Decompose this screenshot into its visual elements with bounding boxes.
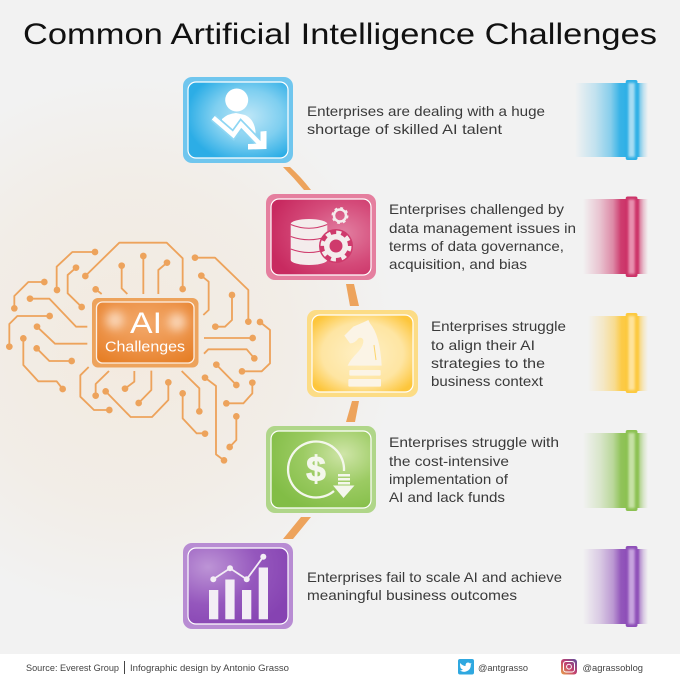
icon: chess knight (344, 320, 382, 387)
text: data management (389, 202, 576, 272)
text: cost and funds: the cost-intensive (389, 454, 509, 469)
source credit (26, 661, 289, 674)
text: strategy alignment: strategies to the (431, 356, 545, 371)
connectors (283, 167, 359, 539)
instagram handle: @agrassoblog (582, 663, 643, 674)
footer (0, 654, 680, 680)
chip: AI Challenges (92, 298, 198, 368)
side tab: yellow (588, 313, 648, 393)
icon: person with falling arrow (213, 88, 266, 150)
source credit: Source: Everest Group (26, 663, 119, 674)
text: talent shortage (307, 104, 545, 137)
card: cost and funds (266, 426, 376, 513)
text: scaling outcomes: meaningful business outcomes (307, 588, 517, 603)
card: data management (266, 194, 376, 280)
side tab: pink (583, 196, 648, 277)
text: cost and funds (389, 435, 559, 505)
card: talent shortage (183, 77, 293, 163)
text: strategy alignment (431, 319, 566, 389)
title: Common Artificial Intelligence Challenges (23, 18, 657, 51)
text: talent shortage: shortage of skilled AI talent (307, 122, 502, 137)
text: scaling outcomes (307, 570, 562, 603)
side tab: blue (575, 80, 648, 160)
side tab: green (583, 430, 648, 511)
text: scaling outcomes: Enterprises fail to scale AI and achieve (307, 570, 562, 585)
text: cost and funds: Enterprises struggle with (389, 435, 559, 450)
source credit: Infographic design by Antonio Grasso (130, 663, 289, 674)
brain circuit (6, 243, 270, 464)
text: strategy alignment: Enterprises struggle (431, 319, 566, 334)
text: strategy alignment: to align their AI (431, 338, 535, 353)
text: data management: Enterprises challenged by (389, 202, 564, 217)
text: talent shortage: Enterprises are dealing with a huge (307, 104, 545, 119)
icon: instagram (561, 659, 577, 674)
card: scaling outcomes (183, 543, 293, 629)
chip: AI Challenges: Challenges (105, 338, 185, 356)
icon: database with gears (291, 208, 353, 265)
card: strategy alignment (307, 310, 418, 397)
text: strategy alignment: business context (431, 374, 543, 389)
text: cost and funds: implementation of (389, 472, 508, 487)
side tab: purple (583, 546, 648, 627)
text: cost and funds: AI and lack funds (389, 490, 505, 505)
text: data management: acquisition, and bias (389, 257, 527, 272)
icon: twitter (458, 659, 474, 674)
chip: AI Challenges: AI (130, 307, 162, 340)
twitter handle: @antgrasso (478, 663, 528, 674)
icon: bar chart with trend line (209, 554, 268, 619)
text: data management: terms of data governance, (389, 239, 564, 254)
icon: dollar with down arrow: $ (306, 450, 326, 489)
text: data management: data management issues in (389, 221, 576, 236)
